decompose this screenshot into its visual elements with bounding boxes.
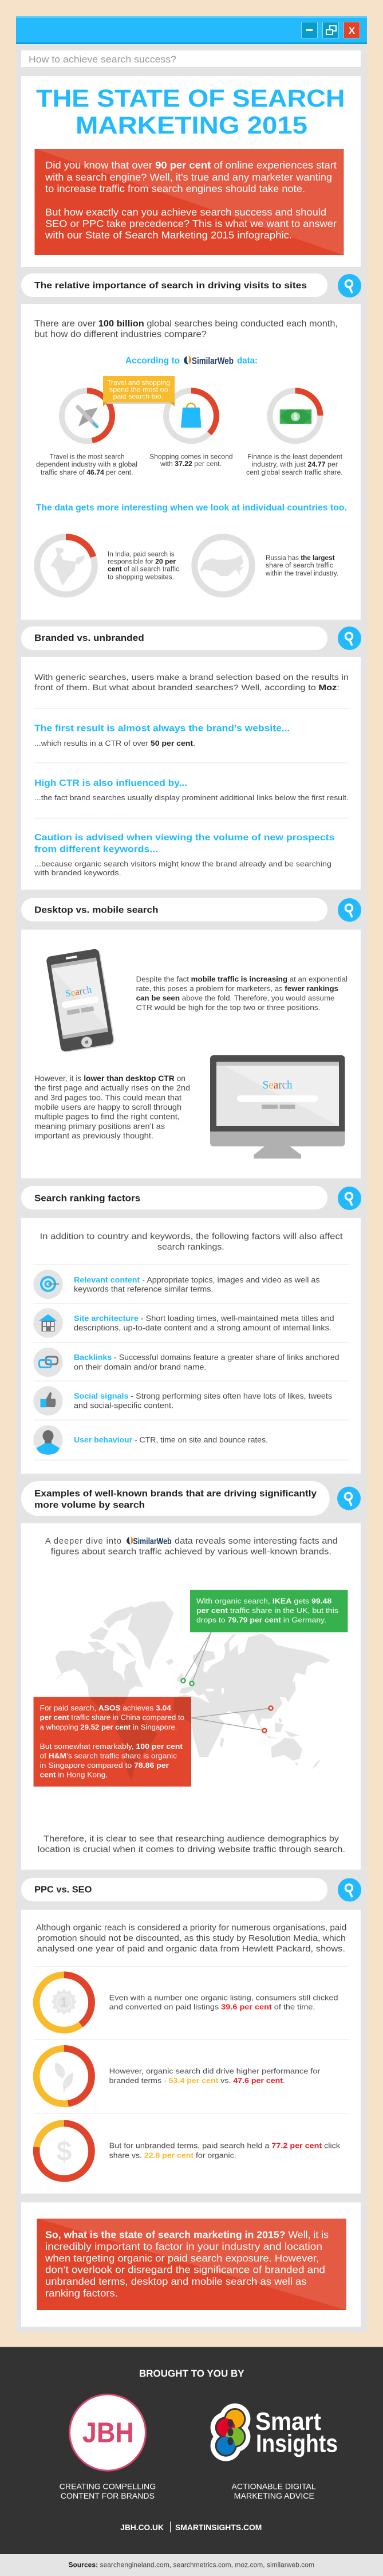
factor: backlinks: Backlinks - Successful domains feature a greater share of links anchored: [74, 1353, 339, 1362]
conclusion callout: incredibly important to factor in your industry and location: [45, 2241, 322, 2252]
website links: JBH.CO.UK: [120, 2523, 164, 2532]
window buttons: [301, 22, 360, 38]
factor: relevant content: keywords that reference similar terms.: [74, 1285, 213, 1293]
callout: IKEA: per cent traffic share in the UK, but this: [196, 1606, 339, 1615]
heading: PPC vs SEO: [21, 1878, 327, 1901]
icon: magnifier: [338, 1187, 361, 1210]
callout: ASOS and H&M: But somewhat remarkably, 100 per cent: [40, 1742, 183, 1751]
factor: social signals: Social signals - Strong performing sites often have lots of likes, tweets: [74, 1392, 332, 1400]
intro callout: But how exactly can you achieve search success and should: [45, 206, 326, 218]
text: number one listing: and converted on paid listings 39.6 per cent of the time.: [109, 2003, 315, 2011]
text: number one listing: Even with a number one organic listing, consumers still clicked: [109, 1993, 338, 2002]
intro text: There are over 100 billion global searches being conducted each month,: [34, 319, 338, 329]
tagline: JBH: CREATING COMPELLING: [60, 2481, 156, 2491]
factor: social signals: and social-specific content.: [74, 1401, 173, 1410]
factor: relevant content: Relevant content - Appropriate topics, images and video as well as: [74, 1275, 320, 1284]
icon: magnifier: [338, 627, 361, 650]
website links: [120, 2522, 262, 2532]
subheading: countries: The data gets more interesting when we look at individual countries too.: [36, 503, 347, 513]
icon: dollar: $: [57, 2136, 72, 2167]
captions: industries: traffic share of 46.74 per cent.: [41, 469, 133, 476]
intro callout: SEO or PPC take precedence? This is what we want to answer: [45, 218, 337, 229]
text: desktop: meaning primary positions aren’t as: [34, 1121, 165, 1130]
intro callout: [34, 149, 343, 255]
callout: IKEA: With organic search, IKEA gets 99.48: [196, 1596, 331, 1605]
icon: Russia map: [200, 555, 244, 576]
icon: magnifier: [338, 898, 361, 922]
donut: Russia: [195, 537, 252, 594]
text: desktop: and 3rd pages too. This could mean that: [34, 1093, 181, 1102]
logo: Smart Insights: Insights: [256, 2430, 338, 2458]
icon: desktop monitor: Search: [263, 1079, 293, 1091]
text: mobile: [136, 974, 348, 1012]
donut: number one listing: [37, 1975, 92, 2030]
text: desktop: mobile users are happy to scroll through: [34, 1102, 181, 1111]
heading: examples of brands: Examples of well-known brands that are driving significantly: [34, 1489, 317, 1498]
text: India: cent of all search traffic: [108, 566, 179, 573]
icon: phone: [46, 948, 115, 1053]
heading: examples of brands: more volume by search: [34, 1501, 145, 1510]
text: branded terms: However, organic search did drive higher performance for: [109, 2066, 321, 2075]
window buttons: X: [349, 25, 356, 36]
text: mobile: rate, this poses a problem for marketers, as fewer rankings: [136, 984, 338, 993]
donut: unbranded terms: [33, 2120, 95, 2182]
icon: magnifier: [338, 1878, 361, 1902]
captions: industries: dependent industry with a global: [36, 461, 137, 468]
title: MARKETING 2015: [76, 112, 307, 139]
factor: user behaviour: User behaviour - CTR, time on site and bounce rates.: [74, 1436, 268, 1444]
text: branded terms: branded terms - 53.4 per cent vs. 47.6 per cent .: [109, 2076, 285, 2085]
callout: ASOS and H&M: cent in Hong Kong.: [40, 1771, 108, 1779]
conclusion text: Therefore, it is clear to see that researching audience demographics by: [44, 1835, 339, 1844]
sources bar: Sources: searchengineland.com, searchmetrics.com, moz.com, similarweb.com: [69, 2561, 314, 2569]
conclusion callout: So, what is the state of search marketing in 2015? Well, it is: [45, 2229, 329, 2240]
factor: user behaviour: [33, 1425, 268, 1455]
intro text: [45, 1536, 338, 1556]
tagline: Smart Insights: ACTIONABLE DIGITAL: [231, 2481, 316, 2491]
icon: shopping bag: [181, 404, 202, 428]
text: desktop: important as previously thought.: [34, 1131, 153, 1140]
heading: desktop vs mobile: [21, 898, 327, 921]
search bar: [21, 50, 361, 67]
text: unbranded terms: But for unbranded terms, paid search held a 77.2 per cent click: [109, 2142, 341, 2150]
sources bar: [0, 2554, 383, 2576]
logo: JBH: [70, 2394, 145, 2471]
callout: ASOS and H&M: in Singapore compared to 78.86 per: [40, 1761, 169, 1769]
conclusion callout: ranking factors.: [45, 2287, 118, 2299]
heading: relative importance: The relative importance of search in driving visits to sites: [34, 281, 307, 291]
donut: travel: [62, 391, 112, 441]
captions: industries: Finance is the least dependent: [247, 453, 343, 460]
captions: industries: Travel is the most search: [50, 453, 125, 460]
world map: [53, 1601, 330, 1780]
intro text: promotion should not be discounted, as this study by Resolution Media, which: [37, 1934, 346, 1943]
intro text: SimilarWeb: [133, 1537, 172, 1547]
captions: industries: Shopping comes in second: [149, 453, 233, 460]
finding: caution: from different keywords...: [34, 845, 158, 855]
title: THE STATE OF SEARCH: [36, 85, 345, 112]
intro text: In addition to country and keywords, the following factors will also affect: [40, 1232, 342, 1242]
donut: finance: [270, 391, 321, 441]
text: Russia: share of search traffic: [266, 562, 333, 569]
heading: PPC vs SEO: PPC vs. SEO: [34, 1885, 92, 1895]
intro text: [36, 1924, 346, 1954]
heading: relative importance: [21, 273, 327, 297]
text: Russia: Russia has the largest: [266, 555, 335, 562]
donut: branded terms: [37, 2049, 92, 2104]
according to SimilarWeb: SimilarWeb: [192, 355, 234, 366]
finding: caution: ...because organic search visitors might know the brand already and be searching: [34, 860, 331, 868]
text: India: to shopping websites.: [108, 574, 174, 581]
icon: banknote: $: [294, 413, 298, 421]
panel: PPC vs SEO: [21, 1910, 361, 2194]
callout: paid search: [103, 376, 175, 406]
icon: desktop monitor: [210, 1055, 345, 1158]
icon: magnifier: [338, 274, 361, 297]
icon: rank badge: 1: [61, 1995, 68, 2009]
icon: leaves: [55, 2062, 73, 2092]
text: Russia: within the travel industry.: [265, 570, 338, 577]
search bar: How to achieve search success?: [29, 54, 176, 65]
finding: caution: with branded keywords.: [34, 869, 121, 877]
conclusion callout: don’t overlook or disregard the significance of branded and: [45, 2264, 325, 2276]
finding: high CTR: High CTR is also influenced by...: [34, 778, 187, 788]
intro text: data reveals some interesting facts and: [175, 1537, 338, 1546]
callout: ASOS and H&M: [33, 1697, 191, 1787]
donut: India: [37, 537, 94, 594]
text: number one listing: [109, 1993, 338, 2011]
according to SimilarWeb: According to: [125, 356, 180, 366]
intro text: [34, 672, 349, 692]
text: mobile: CTR would be high for the top two or three positions.: [136, 1003, 321, 1012]
panel: industries and countries: [21, 304, 361, 620]
conclusion callout: unbranded terms, desktop and mobile search as well as: [45, 2276, 307, 2287]
panel: brands: [21, 1523, 361, 1870]
intro callout: to increase traffic from search engines should take note.: [45, 183, 305, 194]
text: India: In India, paid search is: [108, 551, 175, 558]
callout: IKEA: drops to 79.79 per cent in Germany.: [196, 1616, 326, 1624]
intro text: front of them. But what about branded searches? Well, according to Moz :: [34, 683, 339, 692]
tagline: Smart Insights: MARKETING ADVICE: [234, 2491, 314, 2500]
finding: first result: The first result is almost always the brand’s website...: [34, 724, 290, 734]
panel: title and intro: [21, 76, 361, 267]
callout: ASOS and H&M: a whopping 29.52 per cent in Singapore.: [40, 1723, 177, 1732]
captions: industries: with 37.22 per cent.: [160, 461, 222, 468]
logo: JBH: JBH: [82, 2418, 134, 2449]
intro callout: with our State of Search Marketing 2015 infographic.: [45, 229, 292, 241]
callout: ASOS and H&M: For paid search, ASOS achieves 3.04: [40, 1704, 171, 1712]
intro text: [34, 319, 338, 339]
text: branded terms: [109, 2066, 321, 2085]
intro callout: with a search engine? Well, it’s true and any marketer wanting: [45, 171, 332, 183]
finding: first result: [34, 724, 290, 747]
finding: caution: [34, 833, 335, 877]
text: desktop: However, it is lower than desktop CTR on: [34, 1074, 185, 1083]
callout: paid search: Travel and shopping: [107, 378, 170, 386]
text: unbranded terms: [109, 2142, 341, 2159]
text: India: [108, 551, 179, 581]
panel: conclusion: [21, 2202, 361, 2327]
heading: branded: Branded vs. unbranded: [34, 633, 144, 643]
factor: backlinks: [33, 1348, 339, 1377]
intro text: figures about search traffic achieved by various well-known brands.: [51, 1547, 331, 1556]
conclusion text: [38, 1835, 345, 1854]
leader lines: [183, 1632, 271, 1731]
icon: phone: Search: [65, 984, 93, 999]
heading: ranking factors: [21, 1186, 327, 1209]
callout: ASOS and H&M: per cent traffic share in China compared to: [40, 1713, 184, 1722]
intro text: but how do different industries compare?: [34, 330, 207, 339]
logo: Smart Insights: [211, 2403, 338, 2461]
text: desktop: multiple pages to find the right content,: [34, 1112, 180, 1121]
text: mobile: Despite the fact mobile traffic is increasing at an exponential: [136, 974, 348, 983]
tagline: JBH: [60, 2481, 156, 2500]
icon: plane: [78, 407, 98, 427]
finding: first result: ...which results in a CTR of over 50 per cent .: [34, 739, 195, 747]
conclusion callout: [37, 2219, 346, 2310]
panel: branded: [21, 657, 361, 890]
tagline: Smart Insights: [231, 2481, 316, 2500]
finding: high CTR: [34, 778, 349, 802]
heading: branded: [21, 627, 327, 650]
intro text: Although organic reach is considered a priority for numerous organisations, paid: [36, 1924, 346, 1933]
captions: industries: cent global search traffic share.: [246, 469, 343, 476]
tagline: JBH: CONTENT FOR BRANDS: [61, 2491, 155, 2500]
intro text: analysed one year of paid and organic data from Hewlett Packard, shows.: [37, 1945, 345, 1954]
heading: examples of brands: [21, 1481, 330, 1516]
conclusion text: location is crucial when it comes to driving website traffic through search.: [38, 1845, 345, 1854]
title: [36, 85, 345, 139]
footer: [0, 2347, 383, 2554]
logo: Smart Insights: Smart: [255, 2407, 321, 2436]
captions: industries: [36, 453, 343, 476]
intro text: [40, 1232, 342, 1252]
map pins: [181, 1678, 273, 1732]
factor: backlinks: on their domain and/or brand name.: [74, 1363, 206, 1371]
finding: caution: Caution is advised when viewing the volume of new prospects: [34, 833, 335, 843]
according to SimilarWeb: data:: [237, 356, 258, 366]
callout: ASOS and H&M: of H&M’s search traffic share is organic: [40, 1752, 177, 1760]
website links: SMARTINSIGHTS.COM: [175, 2523, 262, 2532]
conclusion callout: when targeting organic or paid search exposure. However,: [45, 2252, 319, 2264]
icon: magnifier: [337, 1487, 361, 1510]
panel: desktop vs mobile: [21, 930, 361, 1179]
text: India: responsible for 20 per: [108, 559, 176, 566]
intro text: With generic searches, users make a brand selection based on the results in: [34, 672, 349, 682]
callout: paid search: spend the most on: [109, 386, 168, 394]
donut: shopping: [166, 391, 216, 441]
icon: India map: [50, 547, 85, 586]
factor: relevant content: [33, 1270, 320, 1299]
heading: desktop vs mobile: Desktop vs. mobile search: [34, 906, 158, 915]
text: mobile: can be seen above the fold. Therefore, you would assume: [136, 994, 334, 1003]
text: desktop: [34, 1074, 190, 1140]
finding: high CTR: ...the fact brand searches usually display prominent additional links below the first result.: [34, 794, 349, 802]
factor: social signals: [33, 1386, 332, 1416]
intro callout: Did you know that over 90 per cent of online experiences start: [45, 159, 337, 171]
factor: site architecture: [33, 1308, 334, 1338]
according to SimilarWeb: [125, 355, 258, 366]
heading: ranking factors: Search ranking factors: [34, 1194, 140, 1204]
intro text: search rankings.: [157, 1243, 224, 1252]
brought to you by: BROUGHT TO YOU BY: [139, 2368, 244, 2379]
intro text: A deeper dive into: [45, 1537, 121, 1546]
text: Russia: [265, 555, 338, 577]
text: unbranded terms: share vs. 22.8 per cent for organic.: [109, 2151, 236, 2159]
callout: IKEA: [190, 1590, 348, 1632]
factor: site architecture: Site architecture - Short loading times, well-maintained meta titles and: [74, 1314, 334, 1322]
callout: paid search: paid search too.: [113, 393, 163, 401]
text: desktop: the first page and actually rises on the 2nd: [34, 1083, 190, 1093]
captions: industries: industry, with just 24.77 per: [252, 461, 338, 468]
panel: ranking factors: [21, 1218, 361, 1474]
factor: site architecture: descriptions, up-to-date content and a strong amount of internal links.: [74, 1324, 331, 1332]
